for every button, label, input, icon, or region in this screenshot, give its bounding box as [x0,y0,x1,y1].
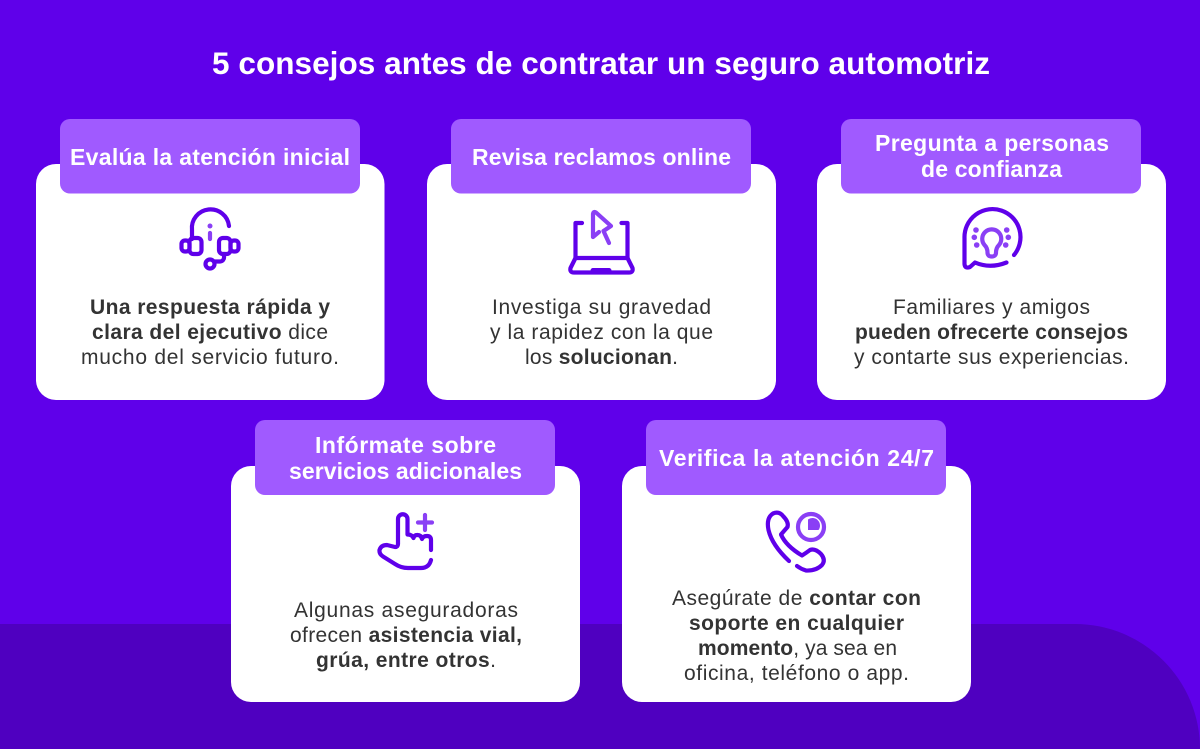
panel: verifica la atención 24/7 [622,420,971,702]
panel: pregunta a personas de confianza [817,119,1166,400]
body text: verifica: momento, ya sea en [698,637,897,660]
body text: infórmate: ofrecen asistencia vial, [290,624,522,647]
panel: infórmate sobre servicios adicionales [231,420,580,702]
heading: pregunta: Pregunta a personas [875,130,1109,156]
body text: evalúa: mucho del servicio futuro. [81,346,339,369]
body text: evalúa: Una respuesta rápida y [90,296,330,319]
body text: revisa: Investiga su gravedad [492,296,711,319]
heading: pregunta: de confianza [921,156,1062,182]
panel: revisa reclamos online [427,119,776,400]
body text: verifica: Asegúrate de contar con [672,587,921,610]
body text: infórmate [290,599,522,672]
icon: pointing hand with plus [379,514,432,568]
icon: phone with clock [768,513,824,571]
icon: speech bubble with bulb [964,209,1020,268]
icon: laptop with cursor [570,212,633,272]
body text: pregunta: y contarte sus experiencias. [854,346,1129,369]
body text: verifica: oficina, teléfono o app. [684,662,909,685]
body text: pregunta: Familiares y amigos [893,296,1090,319]
body text: evalúa: clara del ejecutivo dice [92,321,328,344]
body text: pregunta: pueden ofrecerte consejos [855,321,1128,344]
icon: headset [182,209,238,268]
heading: verifica: Verifica la atención 24/7 [659,445,934,471]
heading: pregunta [875,130,1109,182]
body text: revisa [490,296,713,369]
heading: infórmate: servicios adicionales [289,458,522,484]
body text: verifica [672,587,921,685]
body text: revisa: los solucionan. [525,346,678,369]
body text: pregunta [854,296,1129,369]
panel: evalúa la atención inicial [36,119,384,400]
body text: evalúa [81,296,339,369]
heading: revisa: Revisa reclamos online [472,144,731,170]
body text: verifica: soporte en cualquier [689,612,904,635]
title: 5 consejos antes de contratar un seguro automotriz [212,45,990,81]
body text: infórmate: grúa, entre otros. [316,649,496,672]
body text: revisa: y la rapidez con la que [490,321,713,344]
heading: evalúa: Evalúa la atención inicial [70,144,350,170]
background band [0,624,1200,749]
heading: infórmate [289,432,522,484]
body text: infórmate: Algunas aseguradoras [294,599,518,622]
heading: infórmate: Infórmate sobre [315,432,496,458]
